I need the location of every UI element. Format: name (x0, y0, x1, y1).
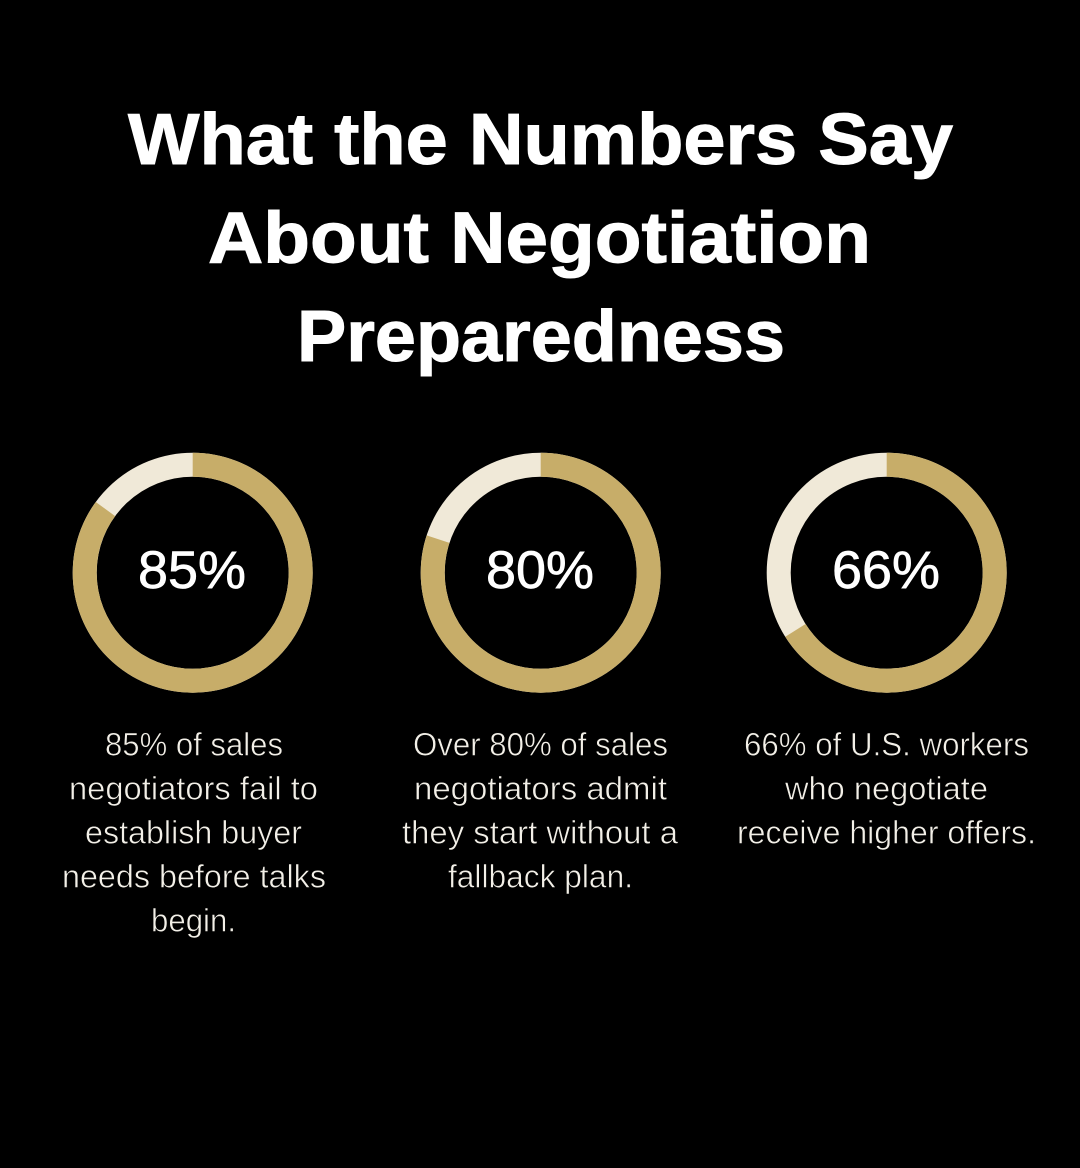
description: 85%: begin. (151, 903, 236, 939)
title: About Negotiation (208, 198, 871, 278)
panel: 80% statistic (402, 465, 679, 895)
description: 80%: they start without a (402, 815, 679, 851)
description: 85%: 85% of sales (105, 727, 283, 763)
description: 85%: establish buyer (85, 815, 302, 851)
description: 66%: 66% of U.S. workers (744, 727, 1029, 763)
description: 66%: receive higher offers. (737, 815, 1036, 851)
description: 66%: who negotiate (784, 771, 988, 807)
description: 85%: needs before talks (62, 859, 326, 895)
description: 85%: negotiators fail to (69, 771, 318, 807)
description: 80%: negotiators admit (414, 771, 667, 807)
description: 80% (402, 727, 679, 895)
donut chart: 80% (433, 465, 649, 681)
value: 85%: 85% (138, 541, 246, 600)
donut chart: 85% (85, 465, 301, 681)
title (128, 100, 953, 377)
title: Preparedness (297, 297, 785, 377)
description: 66% (737, 727, 1036, 851)
description: 85% (62, 727, 326, 939)
value: 66%: 66% (832, 541, 940, 600)
panel: 85% statistic (62, 465, 326, 939)
value: 80%: 80% (486, 541, 594, 600)
description: 80%: fallback plan. (448, 859, 633, 895)
donut chart: 66% (779, 465, 995, 681)
title: What the Numbers Say (128, 100, 953, 180)
description: 80%: Over 80% of sales (413, 727, 668, 763)
panel: 66% statistic (737, 465, 1036, 851)
